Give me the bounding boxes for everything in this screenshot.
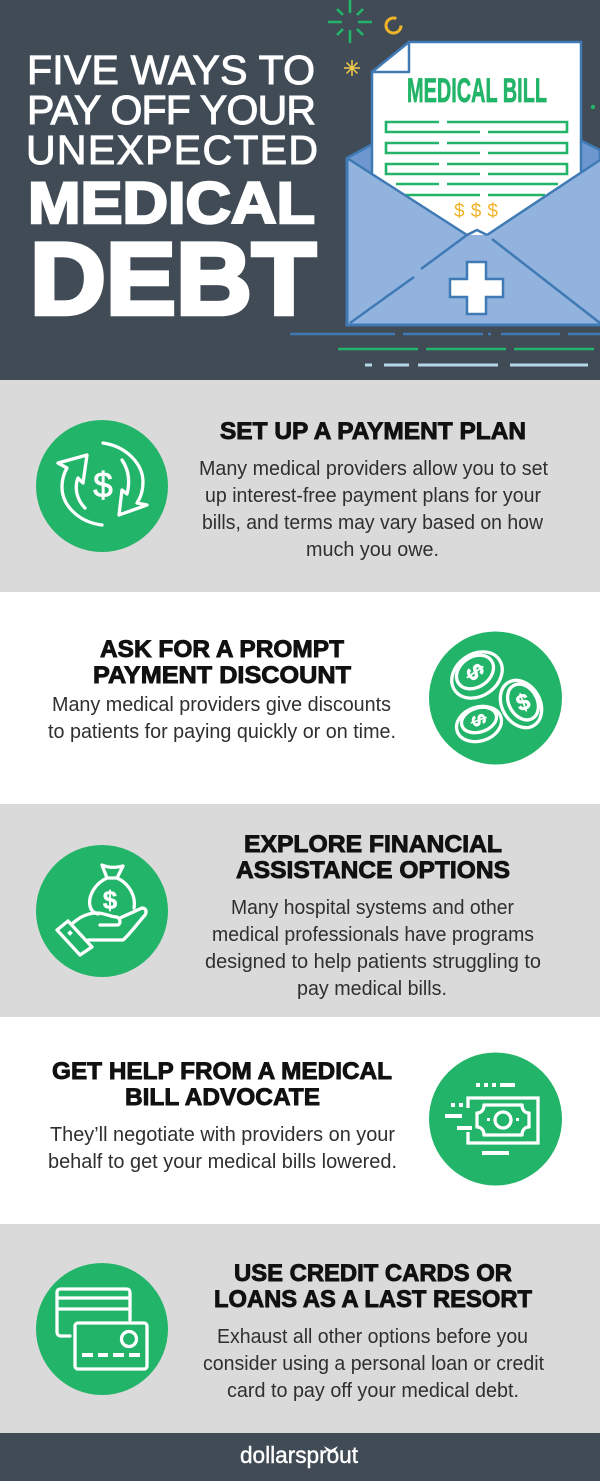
- envelope flaps: [347, 158, 600, 325]
- body text: Many medical providers give discounts: [52, 694, 391, 716]
- panel: medical bill advocate: [0, 1017, 600, 1224]
- body text: They’ll negotiate with providers on your: [50, 1124, 395, 1146]
- body text: card to pay off your medical debt.: [227, 1380, 519, 1402]
- body text: consider using a personal loan or credit: [203, 1353, 544, 1375]
- body text: [205, 897, 541, 1000]
- icon: coins: [429, 632, 562, 764]
- icon: coins: $: [513, 688, 534, 716]
- body text: Many medical providers allow you to set: [199, 458, 548, 480]
- icon: coins: $: [460, 659, 490, 686]
- heading: PAYMENT DISCOUNT: [93, 662, 351, 689]
- icon: credit cards: [36, 1263, 168, 1395]
- heading: LOANS AS A LAST RESORT: [214, 1286, 532, 1313]
- title: PAY OFF YOUR: [27, 87, 316, 133]
- heading: [93, 636, 351, 689]
- title: [26, 47, 318, 336]
- body text: [48, 694, 396, 743]
- body text: to patients for paying quickly or on time.: [48, 721, 396, 743]
- panel: credit cards or loans: [0, 1224, 600, 1433]
- icon: hand with money bag: $: [103, 885, 118, 915]
- logo: dollarsprout: dollarsprout: [240, 1442, 359, 1468]
- title: UNEXPECTED: [26, 127, 318, 173]
- body text: [48, 1124, 397, 1173]
- body text: designed to help patients struggling to: [205, 951, 541, 973]
- title: FIVE WAYS TO: [27, 47, 315, 93]
- heading: GET HELP FROM A MEDICAL: [52, 1058, 392, 1085]
- bill paper: $$$: [454, 201, 498, 222]
- icon: circular arrows with dollar: $: [93, 466, 113, 505]
- header background: [0, 0, 600, 380]
- icon: flying banknote: [429, 1052, 562, 1186]
- panel: financial assistance options: [0, 804, 600, 1017]
- heading: [214, 1260, 532, 1313]
- footer bar: [0, 1433, 600, 1481]
- heading: SET UP A PAYMENT PLAN: [220, 418, 526, 445]
- body text: [199, 458, 548, 561]
- speed lines: [290, 334, 600, 365]
- body text: Exhaust all other options before you: [217, 1326, 528, 1348]
- heading: EXPLORE FINANCIAL: [244, 831, 502, 858]
- icon: coins: $: [466, 711, 490, 729]
- illustration: envelope and medical bill: [347, 42, 600, 325]
- body text: pay medical bills.: [297, 978, 447, 1000]
- body text: medical professionals have programs: [212, 924, 534, 946]
- body text: behalf to get your medical bills lowered.: [48, 1151, 397, 1173]
- heading: [236, 831, 510, 884]
- heading: [52, 1058, 392, 1111]
- cross: [450, 262, 503, 314]
- heading: BILL ADVOCATE: [125, 1084, 320, 1111]
- body text: bills, and terms may vary based on how: [202, 512, 544, 534]
- heading: ASSISTANCE OPTIONS: [236, 857, 510, 884]
- heading: USE CREDIT CARDS OR: [234, 1260, 512, 1287]
- panel: set up a payment plan: [0, 380, 600, 592]
- title: DEBT: [30, 222, 316, 336]
- envelope back: [347, 140, 600, 325]
- title: MEDICAL: [28, 171, 315, 236]
- body text: [203, 1326, 544, 1402]
- body text: much you owe.: [306, 539, 439, 561]
- panel: prompt payment discount: [0, 592, 600, 804]
- heading: ASK FOR A PROMPT: [100, 636, 344, 663]
- bill paper: [372, 42, 581, 250]
- body text: up interest-free payment plans for your: [205, 485, 541, 507]
- icon: hand with money bag: [36, 845, 168, 977]
- body text: Many hospital systems and other: [231, 897, 514, 919]
- icon: circular arrows with dollar: [36, 420, 168, 552]
- illustration: sparkles: [328, 0, 595, 109]
